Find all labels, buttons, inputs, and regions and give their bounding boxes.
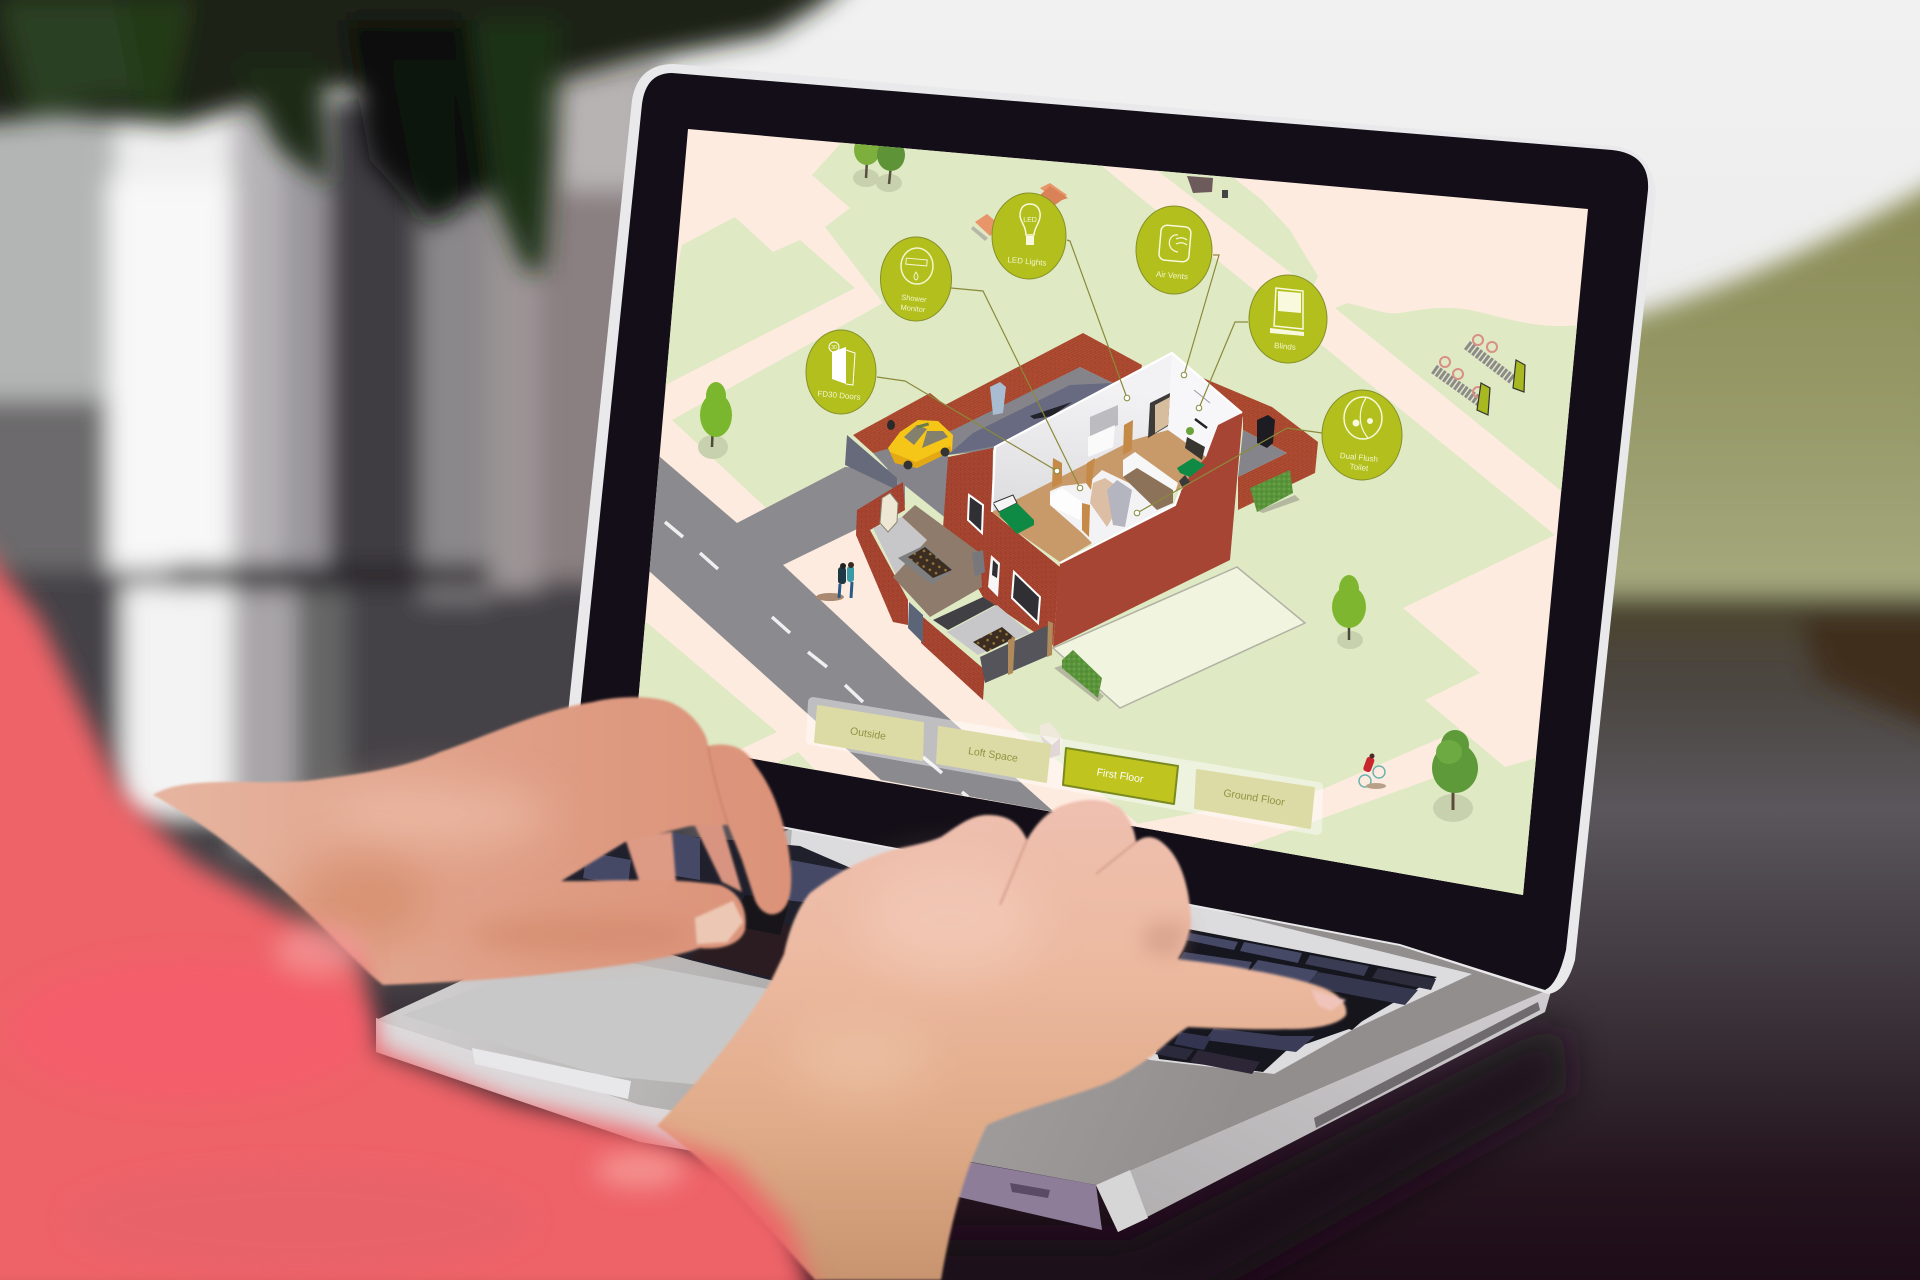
garden gate: [908, 602, 923, 643]
trackpad: [402, 962, 778, 1085]
patio slabs: [893, 505, 982, 617]
taxi car: [888, 420, 953, 470]
brick wall: rear: [853, 333, 1142, 453]
button: Loft Space: [937, 727, 1050, 782]
left room floor: [1010, 490, 1092, 562]
hotspot dots: [1054, 372, 1202, 516]
button: Outside: Outside: [849, 725, 887, 743]
fingers behind: [625, 832, 676, 884]
button: Ground Floor: [1195, 770, 1314, 828]
hedge: front: [1054, 650, 1104, 702]
paths: [1133, 737, 1443, 846]
garage door: [845, 435, 897, 490]
callout: LED Lights: LED: [1023, 217, 1037, 224]
button: First Floor: First Floor: [1096, 766, 1145, 786]
callout: Shower Monitor: [880, 237, 952, 321]
vent pipe: [990, 382, 1006, 415]
callout: Dual Flush Toilet: Toilet: [1349, 462, 1369, 473]
right hand and forearm: [657, 800, 1346, 1280]
callout: FD30 Doors: FD30 Doors: [817, 389, 861, 402]
callout: Dual Flush Toilet: Dual Flush: [1339, 451, 1378, 464]
picnic benches: [971, 183, 1068, 241]
bench: [1040, 722, 1062, 760]
back wall: [992, 353, 1172, 512]
trees: top: [853, 144, 905, 192]
floor selector panel: [811, 702, 1318, 830]
fence: [980, 623, 1053, 683]
laptop: [376, 64, 1656, 1232]
garden brick walls: [856, 482, 908, 625]
boiler cupboard: [1107, 480, 1132, 527]
callout: LED Lights: [992, 193, 1066, 279]
solid red wall: [1053, 412, 1243, 647]
planter one: [898, 545, 953, 585]
cycle racks and kiosks: [1434, 335, 1525, 415]
front door: [988, 555, 1000, 597]
tree: right: [1332, 575, 1366, 649]
keys: [583, 832, 1436, 1074]
shirt highlights: [10, 925, 685, 1270]
blurred office stripes: [0, 60, 690, 990]
dark rug: [933, 597, 995, 630]
callout: Dual Flush Toilet: [1322, 390, 1402, 480]
house windows: [968, 495, 983, 533]
button: Outside: [815, 706, 923, 760]
callout: Shower Monitor: Shower: [901, 293, 928, 304]
laptop base: [376, 815, 1552, 1232]
callout: Blinds: Blinds: [1274, 341, 1296, 352]
callout: LED Lights: LED Lights: [1007, 255, 1047, 268]
callout: FD30 Doors: [806, 330, 876, 414]
keyboard well: [780, 828, 1472, 1074]
leader lines: [877, 240, 1322, 513]
button: Ground Floor: Ground Floor: [1223, 787, 1286, 809]
laptop lid: [560, 64, 1656, 994]
pink shirt sleeve: [0, 530, 816, 1280]
cyclist: [1359, 754, 1386, 789]
radiator: [1090, 405, 1118, 436]
screen: isometric home map: [638, 129, 1588, 895]
button: First Floor: [1063, 748, 1178, 804]
road: [650, 456, 1054, 812]
beds: [993, 495, 1017, 512]
callout: Blinds: [1249, 275, 1327, 363]
storage box: [1257, 415, 1275, 448]
central white block: [1048, 470, 1175, 545]
callout: Air Vents: Air Vents: [1156, 270, 1188, 281]
people walking: [816, 562, 854, 601]
right wall: [1168, 353, 1242, 457]
road dashes: [665, 522, 968, 797]
doors: [1052, 420, 1133, 537]
tree: bottom right: [1432, 730, 1478, 822]
back yard wall: [1203, 378, 1318, 510]
roof slope: [948, 383, 1113, 455]
callout: Shower Monitor: Monitor: [900, 303, 926, 314]
concrete patio: [1053, 567, 1305, 708]
hand: [153, 697, 791, 985]
plant foliage: [0, 0, 860, 270]
planter two: [973, 627, 1015, 652]
left hand: [153, 697, 791, 985]
hedge: rear: [1250, 470, 1300, 513]
tree: left: [698, 382, 732, 459]
cut wall edge: [992, 353, 1242, 563]
floors: [992, 430, 1206, 562]
shelf unit: [880, 493, 898, 532]
callout: FD30 Doors: 30: [831, 345, 837, 351]
interior cutaway: [992, 353, 1242, 563]
skylight: [1030, 402, 1072, 419]
keyboard bed: [1140, 929, 1437, 1072]
map ground: [638, 129, 1588, 895]
air source unit: [972, 550, 985, 577]
front garden: [856, 482, 1053, 700]
rear paved yard and walls: [845, 333, 1142, 520]
gravel: [873, 517, 927, 593]
seated figure and bin: [1187, 176, 1228, 198]
button: Loft Space: Loft Space: [967, 745, 1019, 765]
wall blind details: [1194, 390, 1210, 403]
house side facade: [943, 448, 1060, 645]
callout: Air Vents: [1136, 206, 1212, 294]
